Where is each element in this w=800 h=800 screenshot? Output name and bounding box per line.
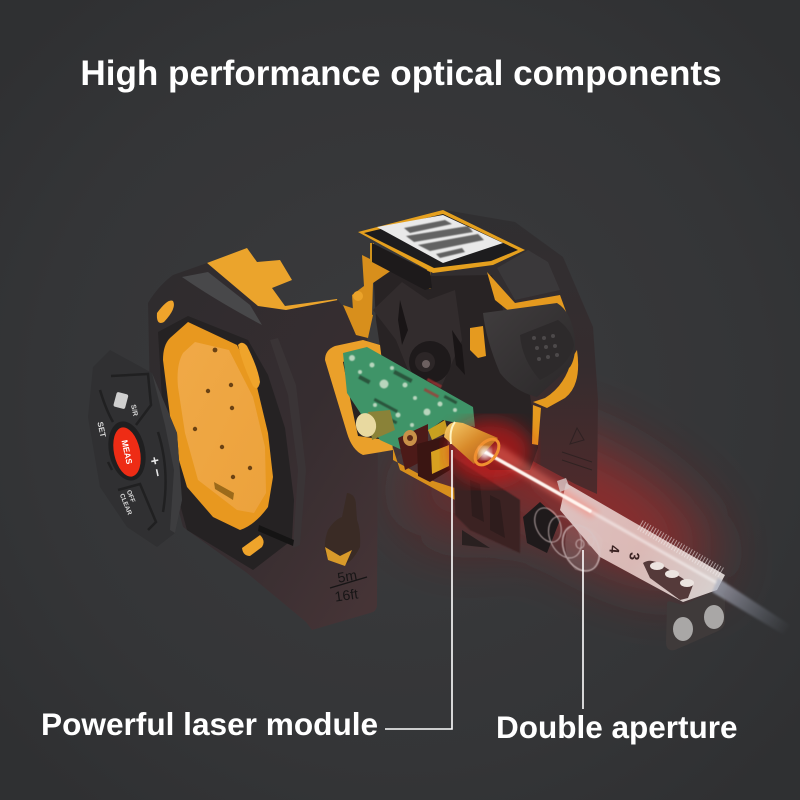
yellow corner accents (157, 300, 174, 323)
capacity marking: 16ft (334, 585, 359, 605)
upper shoulder highlight (182, 272, 262, 325)
leader line: double aperture (582, 550, 584, 709)
display top unit (358, 210, 525, 290)
lower dark laser mount (453, 457, 520, 553)
dark mechanism (372, 250, 538, 470)
MEAS button (103, 418, 151, 484)
control button disc: OFF (125, 489, 136, 504)
measuring tape (560, 483, 725, 602)
right housing outer shell (400, 210, 598, 494)
lower yellow chassis and dark blocks (393, 448, 455, 500)
capacity marking (330, 567, 367, 605)
title: High performance optical components (80, 54, 722, 93)
top yellow frame (207, 248, 340, 320)
laser beam (483, 445, 790, 636)
beige capacitor (353, 410, 395, 440)
leader line: laser module (385, 450, 452, 729)
control button disc: + − (146, 455, 166, 478)
capacity marking: 5m (336, 567, 358, 586)
housing body (148, 263, 378, 630)
dark slots (258, 525, 294, 546)
yellow frame pieces (352, 255, 392, 315)
brass laser module (444, 422, 504, 469)
green circuit board (343, 347, 475, 450)
plate screw holes (193, 348, 252, 500)
cut-away interior and right housing (325, 210, 598, 553)
button grooves (100, 374, 166, 530)
label: powerful laser module: Powerful laser module (41, 706, 378, 742)
button legends: SET (95, 421, 107, 438)
control button disc: S/R (129, 404, 138, 417)
laser warning mark (562, 428, 592, 470)
measuring tape: 3 (626, 552, 643, 561)
tape numbers: 4 (606, 545, 623, 554)
red laser glow (400, 401, 732, 609)
display digits (404, 220, 484, 258)
tape end rivets (643, 561, 693, 600)
yellow side plate (163, 322, 273, 530)
MEAS button: MEAS (120, 439, 135, 465)
yellow PCB cradle (325, 340, 393, 455)
rim around plate (158, 316, 294, 570)
double aperture lens assembly (523, 478, 607, 577)
keyhole slot (325, 493, 360, 565)
control button disc (88, 350, 182, 547)
left housing of the tape measure (148, 248, 378, 630)
rear button (483, 303, 575, 397)
red haze over mechanism (448, 420, 532, 484)
label: double aperture: Double aperture (496, 709, 738, 745)
tape hook (666, 592, 725, 650)
control button disc: CLEAR (118, 493, 133, 516)
